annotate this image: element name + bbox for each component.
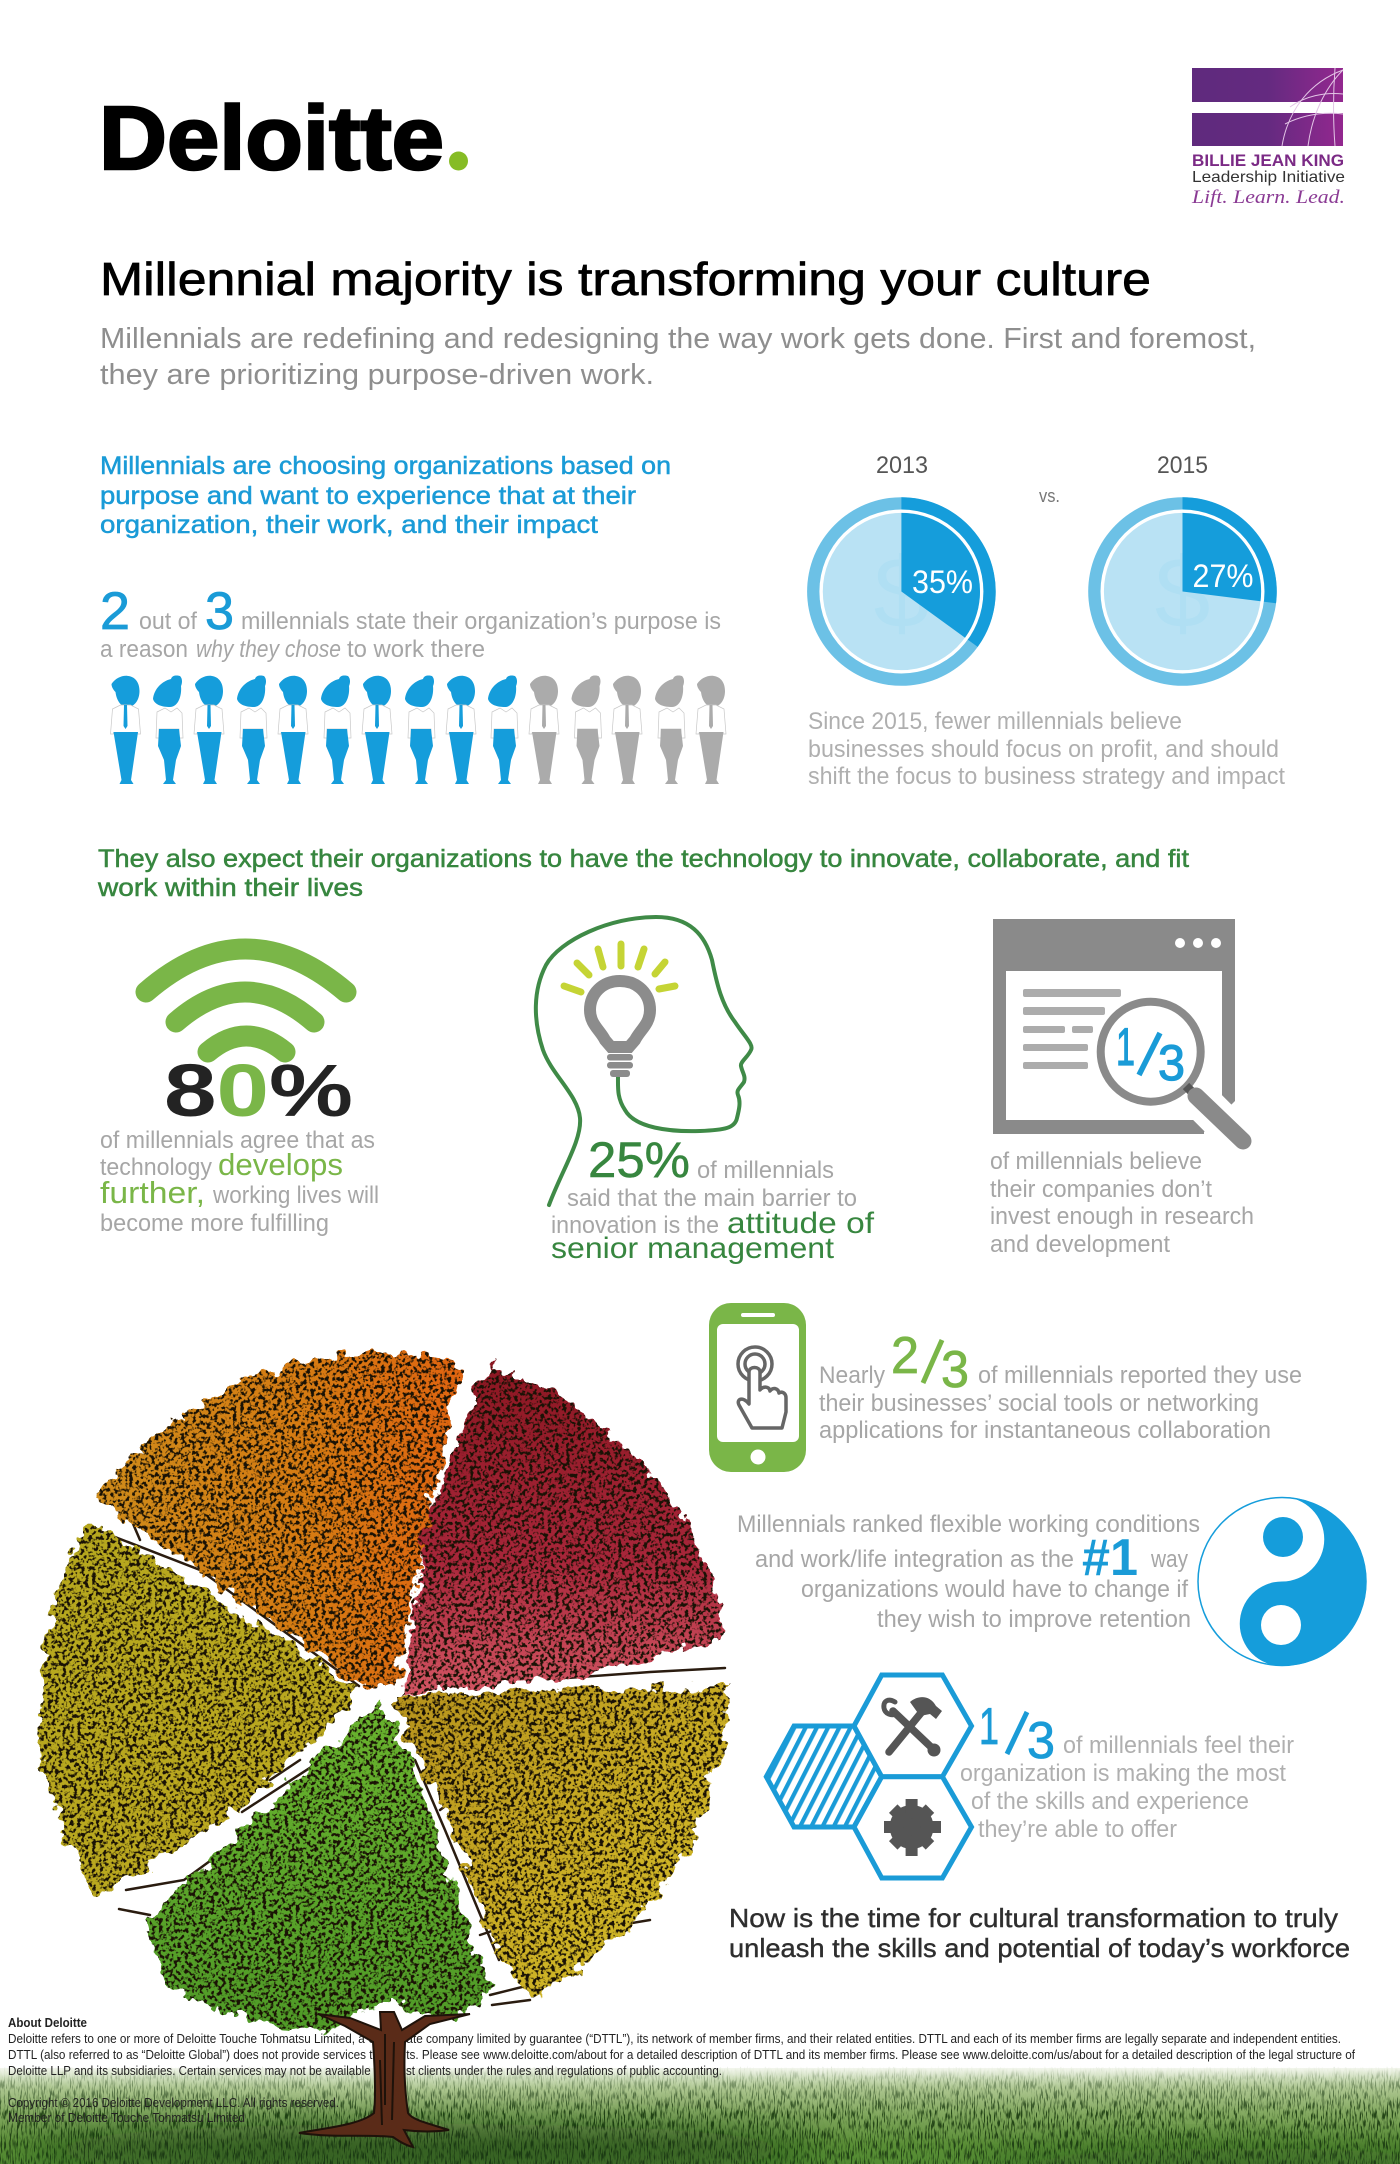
tree trunk (299, 2012, 470, 2147)
text: 1/3 skills and experience: of the skills and experience (971, 1788, 1249, 1815)
heading: technology (97, 845, 1189, 902)
text: research and development: and development (990, 1231, 1170, 1258)
stat: 2 out of 3: out of (139, 608, 197, 635)
stat: 2 out of 3 (100, 582, 721, 663)
pie chart 2015: 27%: 27% (1192, 558, 1254, 594)
text: 1/3 skills and experience: organization is making the most (960, 1760, 1286, 1787)
closing statement (729, 1903, 1350, 1963)
text: technology develops further: technology (100, 1154, 212, 1181)
text: technology develops further: develops (218, 1147, 343, 1182)
text: 1/3 skills and experience: of millennials feel their (1063, 1732, 1294, 1759)
stat: 2 out of 3: millennials state their organization’s purpose is (241, 608, 721, 635)
pie chart 2013: 35%: $ (874, 537, 929, 649)
icon: hexagons with tools (766, 1675, 972, 1878)
text: nearly 2/3: applications for instantaneous collaboration (819, 1417, 1271, 1444)
icon: yin-yang (1198, 1497, 1366, 1666)
footer: about Deloitte: About Deloitte (8, 2016, 87, 2030)
logo: Billie Jean King Leadership Initiative: Leadership Initiative (1192, 169, 1345, 186)
text: technology develops further (100, 1127, 379, 1237)
grass (0, 2068, 1400, 2164)
closing statement: unleash the skills and potential of today’s workforce (729, 1933, 1350, 1963)
icon: head with light bulb (536, 917, 752, 1205)
heading: purpose: Millennials are choosing organizations based on (100, 452, 671, 480)
text: #1 flexible working conditions: #1 (1082, 1529, 1138, 1587)
stat: 2 out of 3: a reason (100, 636, 188, 663)
year label 2013: 2013 (876, 452, 928, 479)
text: 25% attitude of senior management: of millennials (697, 1157, 834, 1184)
icon: browser window with magnifier: 3 (1158, 1035, 1185, 1091)
text: #1 flexible working conditions: they wish to improve retention (877, 1606, 1191, 1633)
closing statement: Now is the time for cultural transformation to truly (729, 1903, 1338, 1933)
text: #1 flexible working conditions (737, 1511, 1200, 1633)
text: 25% attitude of senior management: said that the main barrier to (567, 1185, 857, 1212)
foliage: gold slice (393, 1686, 727, 1998)
heading: technology: work within their lives (97, 874, 363, 902)
foliage: red slice (402, 1366, 727, 1694)
icon: browser window with magnifier: 1 (1116, 1018, 1135, 1077)
text: research and development: of millennials believe (990, 1148, 1202, 1175)
heading: purpose: organization, their work, and their impact (100, 511, 598, 539)
text: technology develops further: further, (100, 1175, 205, 1210)
text: 25% attitude of senior management: innovation is the (551, 1212, 719, 1239)
heading: purpose (100, 452, 671, 539)
vs label: vs. (1039, 486, 1060, 506)
stat: 80%: 80% (164, 1049, 353, 1132)
text: research and development: their companies don’t (990, 1176, 1212, 1203)
text: 25% attitude of senior management: senior management (551, 1232, 835, 1265)
year label 2015: 2015 (1157, 452, 1208, 479)
pie chart 2015: 27% (1088, 497, 1277, 686)
text: nearly 2/3: their businesses’ social tools or networking (819, 1390, 1259, 1417)
text: profit vs strategy (808, 708, 1285, 790)
text: technology develops further: working lives will (212, 1182, 379, 1209)
pie chart 2013: 35% (807, 497, 996, 686)
subtitle: they are prioritizing purpose-driven work. (100, 359, 654, 391)
icon: browser window with magnifier (993, 919, 1250, 1150)
icon: wifi signal (146, 949, 346, 1052)
text: 1/3 skills and experience: they’re able to offer (978, 1816, 1177, 1843)
foliage: orange slice (97, 1353, 460, 1686)
text: 1/3 skills and experience: 1 (979, 1698, 999, 1756)
heading: technology: They also expect their organizations to have the technology to innovate, collaborate, and fit (98, 845, 1189, 873)
pie chart 2013: 35%: 35% (912, 564, 973, 600)
logo: Deloitte: Deloitte (99, 89, 444, 189)
logo: Billie Jean King Leadership Initiative: BILLIE JEAN KING (1192, 151, 1344, 170)
footer: about Deloitte: Member of Deloitte Touche Tohmatsu Limited (8, 2111, 245, 2125)
logo: Billie Jean King Leadership Initiative (1191, 68, 1345, 208)
text: nearly 2/3: 2 (891, 1327, 919, 1385)
stat: 2 out of 3: to work there (347, 636, 485, 663)
subtitle (100, 323, 1256, 391)
text: 1/3 skills and experience (960, 1698, 1294, 1843)
stat: 2 out of 3: 3 (205, 582, 234, 641)
footer: about Deloitte: Copyright © 2016 Deloitte Development LLC. All rights reserved. (8, 2096, 339, 2110)
text: profit vs strategy: businesses should focus on profit, and should (808, 736, 1279, 763)
tree branches (97, 1505, 725, 2005)
text: #1 flexible working conditions: Millennials ranked flexible working conditions (737, 1511, 1200, 1538)
subtitle: Millennials are redefining and redesigning the way work gets done. First and foremost, (100, 323, 1256, 355)
footer: about Deloitte: Deloitte LLP and its subsidiaries. Certain services may not be available to attest clients under the rules and regulations of public accounting. (8, 2064, 722, 2078)
text: nearly 2/3: of millennials reported they use (978, 1362, 1302, 1389)
text: profit vs strategy: Since 2015, fewer millennials believe (808, 708, 1182, 735)
footer: about Deloitte: Deloitte refers to one or more of Deloitte Touche Tohmatsu Limited, a UK private company limited by guarantee (“DTTL”), its network of member firms, and their related entities. DTTL and each of its member firms are legally separate and independent entities. (8, 2032, 1341, 2046)
text: technology develops further: become more fulfilling (100, 1210, 329, 1237)
text: nearly 2/3: Nearly (819, 1362, 885, 1389)
stat: 2 out of 3: why they chose (196, 636, 341, 663)
text: #1 flexible working conditions: and work/life integration as the (755, 1546, 1074, 1573)
icon: smartphone with tapping hand (709, 1303, 806, 1472)
text: 25% attitude of senior management (551, 1132, 875, 1265)
text: #1 flexible working conditions: organizations would have to change if (801, 1576, 1188, 1603)
text: profit vs strategy: shift the focus to business strategy and impact (808, 763, 1285, 790)
pictogram: 10 of 15 people highlighted (110, 675, 726, 784)
title: Millennial majority is transforming your culture (100, 253, 1151, 305)
logo: Billie Jean King Leadership Initiative: Lift. Learn. Lead. (1191, 187, 1345, 208)
footer: about Deloitte (8, 2016, 1355, 2125)
foliage: yellow slice (38, 1522, 362, 1896)
text: research and development (990, 1148, 1254, 1258)
heading: purpose: purpose and want to experience that at their (100, 482, 636, 510)
text: 1/3 skills and experience: 3 (1027, 1712, 1055, 1770)
illustration: pie-chart tree (38, 1353, 727, 2147)
text: nearly 2/3 (819, 1327, 1302, 1444)
text: nearly 2/3: 3 (941, 1341, 969, 1399)
text: #1 flexible working conditions: way (1150, 1546, 1188, 1573)
foliage: green slice (145, 1700, 490, 2030)
text: 25% attitude of senior management: 25% (588, 1132, 690, 1188)
pie chart 2015: 27%: $ (1155, 537, 1210, 649)
text: research and development: invest enough in research (990, 1203, 1254, 1230)
text: technology develops further: of millennials agree that as (100, 1127, 375, 1154)
stat: 2 out of 3: 2 (100, 582, 130, 641)
text: 25% attitude of senior management: attitude of (727, 1207, 875, 1240)
